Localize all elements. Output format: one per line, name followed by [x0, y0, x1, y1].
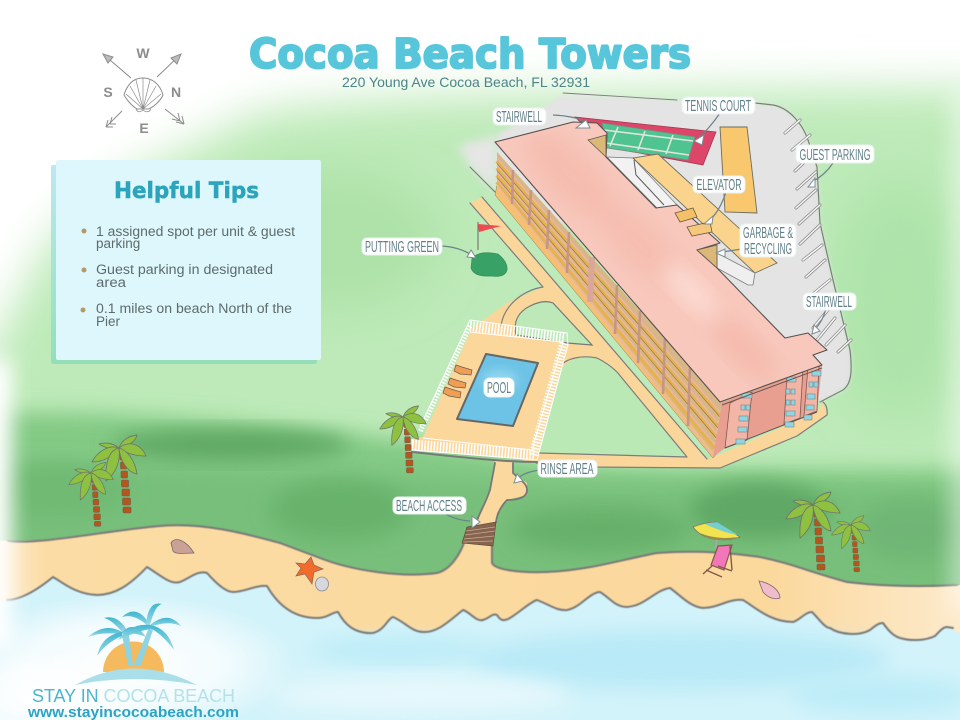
label: beach access — [393, 497, 480, 528]
compass — [103, 45, 184, 136]
scallop shell — [316, 577, 328, 591]
courtyard — [607, 157, 677, 208]
compass: W — [136, 45, 150, 61]
left and right edge fades — [0, 90, 960, 650]
swimming pool — [457, 354, 538, 426]
sand beach — [0, 525, 960, 680]
panel: helpful tips — [51, 160, 321, 364]
tip: assigned spot: 1 assigned spot per unit & guest — [96, 224, 295, 239]
label: elevator: ELEVATOR — [696, 177, 742, 194]
tip: guest parking — [82, 262, 273, 290]
palm tree: right small — [832, 516, 870, 572]
label: pool: POOL — [487, 380, 511, 397]
label: rinse area: RINSE AREA — [540, 461, 594, 478]
building: south wall — [713, 364, 822, 457]
parking lot — [458, 93, 851, 402]
label: elevator — [693, 176, 745, 224]
label: stairwell south — [803, 293, 856, 334]
roof notch: north stairwell — [588, 135, 606, 157]
label: garbage and recycling — [716, 224, 796, 258]
elevator block 1 — [675, 208, 697, 222]
label: rinse area — [514, 460, 597, 483]
parking space lines — [785, 120, 851, 352]
compass: N — [171, 84, 181, 100]
tip: beach distance: 0.1 miles on beach North of the — [96, 301, 292, 316]
tip: assigned spot: parking — [96, 236, 140, 251]
label: garbage and recycling: RECYCLING — [744, 241, 792, 258]
label: tennis court: TENNIS COURT — [685, 98, 751, 115]
conch shell — [171, 540, 194, 554]
beach umbrella and chair — [693, 522, 740, 577]
tip: beach distance — [80, 301, 292, 329]
palm tree: left large — [92, 435, 146, 513]
panel heading: Helpful Tips — [114, 179, 259, 204]
sand paths — [465, 197, 827, 544]
logo wordmark: STAY IN COCOA BEACH — [32, 686, 235, 706]
palm tree: right large — [786, 492, 840, 570]
sea — [0, 567, 960, 720]
pool deck — [412, 320, 568, 462]
compass: E — [139, 120, 149, 136]
label: guest parking: GUEST PARKING — [800, 147, 870, 164]
putting green — [471, 222, 507, 276]
title: Cocoa Beach Towers — [249, 30, 691, 78]
roof notch: south — [697, 245, 717, 268]
label: garbage and recycling: GARBAGE & — [743, 225, 793, 242]
boardwalk bridge — [462, 522, 496, 546]
tip: beach distance: Pier — [96, 314, 121, 329]
pink shell — [759, 581, 780, 599]
tennis court — [575, 117, 716, 165]
tip: guest parking: area — [96, 275, 127, 290]
lounge chairs — [443, 365, 472, 398]
label: stairwell south: STAIRWELL — [806, 294, 852, 311]
tip: guest parking: Guest parking in designated — [96, 262, 273, 277]
building: balcony side — [497, 152, 722, 456]
tip: assigned spot — [82, 224, 295, 251]
address: 220 Young Ave Cocoa Beach, FL 32931 — [342, 74, 590, 90]
carport: long — [720, 127, 757, 213]
building: roof — [495, 121, 827, 405]
label: guest parking — [796, 145, 874, 187]
garbage and recycling shelter — [717, 253, 755, 285]
shoreline and grass edge ink — [7, 525, 957, 640]
label: beach access: BEACH ACCESS — [396, 498, 462, 515]
starfish — [296, 557, 323, 584]
walkway strip beside building — [495, 185, 722, 458]
label: tennis court — [682, 97, 755, 145]
carport: inner — [633, 154, 777, 273]
label: stairwell north: STAIRWELL — [496, 109, 542, 126]
elevator block 2 — [687, 222, 712, 236]
logo: stay in cocoa beach — [75, 603, 197, 685]
palm tree: left small — [69, 462, 113, 526]
compass: S — [103, 84, 113, 100]
background: dark grass band — [0, 412, 960, 620]
palm tree: by pool — [380, 406, 426, 473]
label: putting green: PUTTING GREEN — [365, 239, 439, 256]
label: pool — [484, 378, 514, 397]
